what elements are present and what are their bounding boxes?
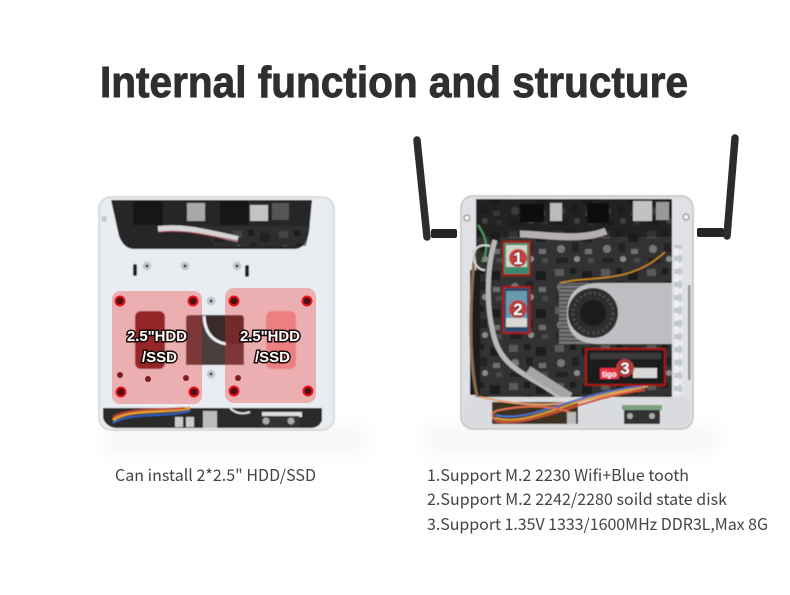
antenna left	[417, 140, 457, 238]
panel: right device, motherboard	[417, 138, 735, 450]
bay: left drive highlight	[112, 291, 202, 404]
caption: feature list: 1.Support M.2 2230 Wifi+Blue tooth	[427, 462, 689, 486]
side vents	[674, 245, 690, 395]
caption: feature list: 2.Support M.2 2242/2280 soild state disk	[427, 486, 727, 510]
title: Internal function and structure	[100, 58, 688, 107]
chassis	[461, 196, 693, 429]
top board cut-out	[111, 200, 312, 249]
bay: left drive highlight: /SSD	[142, 349, 177, 366]
callout 3: DDR3L memory: tigo	[602, 370, 617, 379]
corner screws	[464, 214, 689, 409]
antenna right	[697, 138, 735, 237]
callout 3: DDR3L memory	[586, 349, 665, 385]
bay: right drive highlight	[225, 288, 316, 403]
callout 1: wifi module	[503, 242, 530, 275]
callout 3: DDR3L memory: 3	[620, 359, 630, 378]
caption: left device: Can install 2*2.5" HDD/SSD	[115, 462, 316, 486]
dark openings under bays	[135, 311, 165, 369]
label: left HDD: 2.5"HDD	[127, 328, 187, 345]
mainboard	[476, 199, 672, 397]
label: right HDD: 2.5"HDD	[240, 328, 300, 345]
bottom chassis area with cables	[464, 386, 690, 427]
bottom board strip	[103, 408, 322, 428]
device chassis	[99, 197, 334, 430]
panel: left device, 2.5 inch drive bays	[99, 197, 365, 452]
callout 2: SSD: 2	[513, 300, 523, 319]
heatsink and fan	[559, 283, 672, 344]
callout 2: SSD	[503, 287, 530, 333]
callout 1: wifi module: 1	[513, 249, 523, 268]
mounting holes	[102, 218, 240, 377]
ribbon cables	[471, 225, 665, 400]
bay: right drive highlight: /SSD	[255, 349, 290, 366]
caption: feature list: 3.Support 1.35V 1333/1600MHz DDR3L,Max 8G	[427, 511, 768, 535]
caption: feature list	[427, 462, 768, 535]
